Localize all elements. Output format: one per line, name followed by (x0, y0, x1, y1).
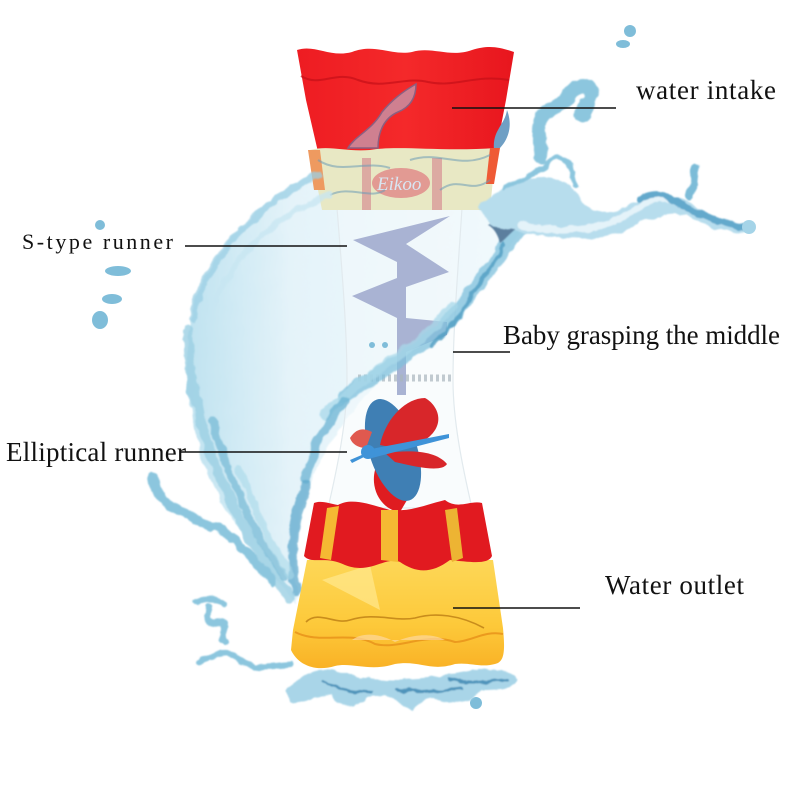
label: Elliptical runner: Elliptical runner (6, 437, 186, 467)
toy: clear tube (328, 208, 472, 508)
toy: band under cup (310, 148, 496, 210)
water: dark fold at right of tube (488, 218, 525, 243)
toy: bottom base (291, 500, 504, 668)
base: red collar (304, 500, 492, 570)
water: lower splashes (152, 478, 518, 710)
label: Water outlet: Water outlet (605, 570, 744, 600)
label: S-type runner: S-type runner (22, 229, 174, 254)
toy: mesh divider (358, 374, 454, 382)
toy: elliptical runner (350, 392, 449, 512)
cup: water stream on cup (348, 84, 416, 148)
water: blue droplets (92, 25, 756, 709)
water swoosh body (188, 172, 530, 604)
toy: S-type spiral runner (352, 216, 450, 395)
cup: splash on right edge (494, 110, 510, 150)
label: water intake: water intake (636, 75, 776, 105)
label: Baby grasping the middle: Baby grasping the middle (503, 320, 780, 350)
band: brand logo (372, 168, 430, 198)
band: water ripples (318, 155, 490, 195)
band: brand logo: Eikoo (376, 174, 421, 195)
water swoosh front strokes (188, 176, 525, 598)
water: right splash streak (480, 86, 752, 239)
toy: top red cup (297, 47, 514, 210)
